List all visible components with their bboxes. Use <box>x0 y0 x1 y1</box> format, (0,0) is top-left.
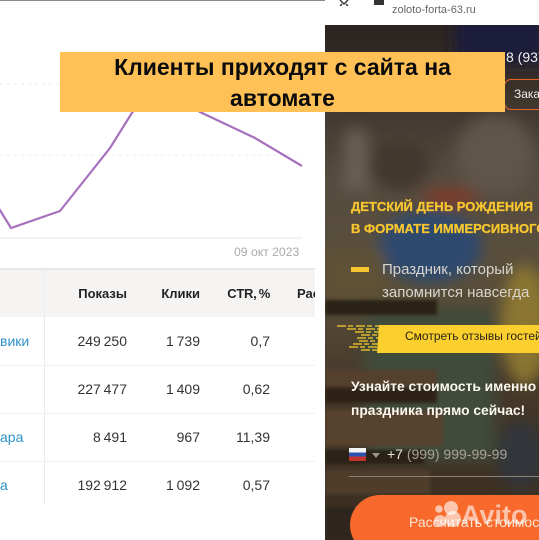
yellow brush button: Смотреть отзывы гостей <box>405 329 539 343</box>
hero subtitle: запомнится навсегда <box>382 284 529 301</box>
top edge line <box>0 0 325 1</box>
hero heading <box>350 199 539 236</box>
hero photo background <box>325 25 539 540</box>
form heading: праздника прямо сейчас! <box>351 403 525 418</box>
browser bar: close icon and url: zoloto-forta-63.ru <box>392 4 476 16</box>
data table: 1 739 <box>166 333 200 349</box>
form heading: Узнайте стоимость именно <box>351 379 536 394</box>
yellow brush button <box>337 325 539 353</box>
hero subtitle <box>382 261 530 301</box>
row 1: вики <box>0 333 29 349</box>
title text: автомате <box>230 85 335 111</box>
data table: 0,57 <box>243 477 270 493</box>
table header <box>0 268 315 317</box>
data table: 1 409 <box>166 381 200 397</box>
phone input: +7 (999) 999-99-99 <box>387 446 507 462</box>
data table: 249 250 <box>77 333 127 349</box>
title banner <box>60 52 505 112</box>
hero subtitle: Праздник, который <box>382 261 513 278</box>
dropdown arrow <box>372 453 380 458</box>
panel: website screenshot <box>325 25 539 540</box>
data table: CTR, % <box>227 286 270 301</box>
brush stroke <box>337 325 539 353</box>
data table: Клики <box>161 286 200 301</box>
icon: russian flag <box>349 448 366 461</box>
data table: Показы <box>78 286 127 301</box>
data table: 8 491 <box>93 429 127 445</box>
data table: 1 092 <box>166 477 200 493</box>
chart date label: 09 окт 2023 <box>234 245 299 259</box>
orange calculate button <box>350 495 539 540</box>
hero heading: ДЕТСКИЙ ДЕНЬ РОЖДЕНИЯ <box>351 199 533 214</box>
header order button <box>504 79 539 110</box>
avito watermark: Avito <box>461 500 528 530</box>
line chart <box>0 84 302 238</box>
row 3: ара <box>0 429 23 445</box>
icon: close <box>340 0 348 6</box>
data table <box>0 268 315 505</box>
title text <box>114 54 452 111</box>
browser bar: close icon and url <box>340 0 476 16</box>
data table: 11,39 <box>236 429 270 445</box>
row 2: 227 477 <box>77 381 127 397</box>
yellow dash marker <box>351 267 369 272</box>
form heading <box>351 379 536 418</box>
title text: Клиенты приходят с сайта на <box>114 54 451 80</box>
data table: 0,7 <box>251 333 270 349</box>
data table: 967 <box>177 429 200 445</box>
row 4: а <box>0 477 8 493</box>
data table: 192 912 <box>77 477 127 493</box>
icon: avito dots <box>434 501 461 527</box>
input underline <box>349 476 539 477</box>
data table: 0,62 <box>243 381 270 397</box>
